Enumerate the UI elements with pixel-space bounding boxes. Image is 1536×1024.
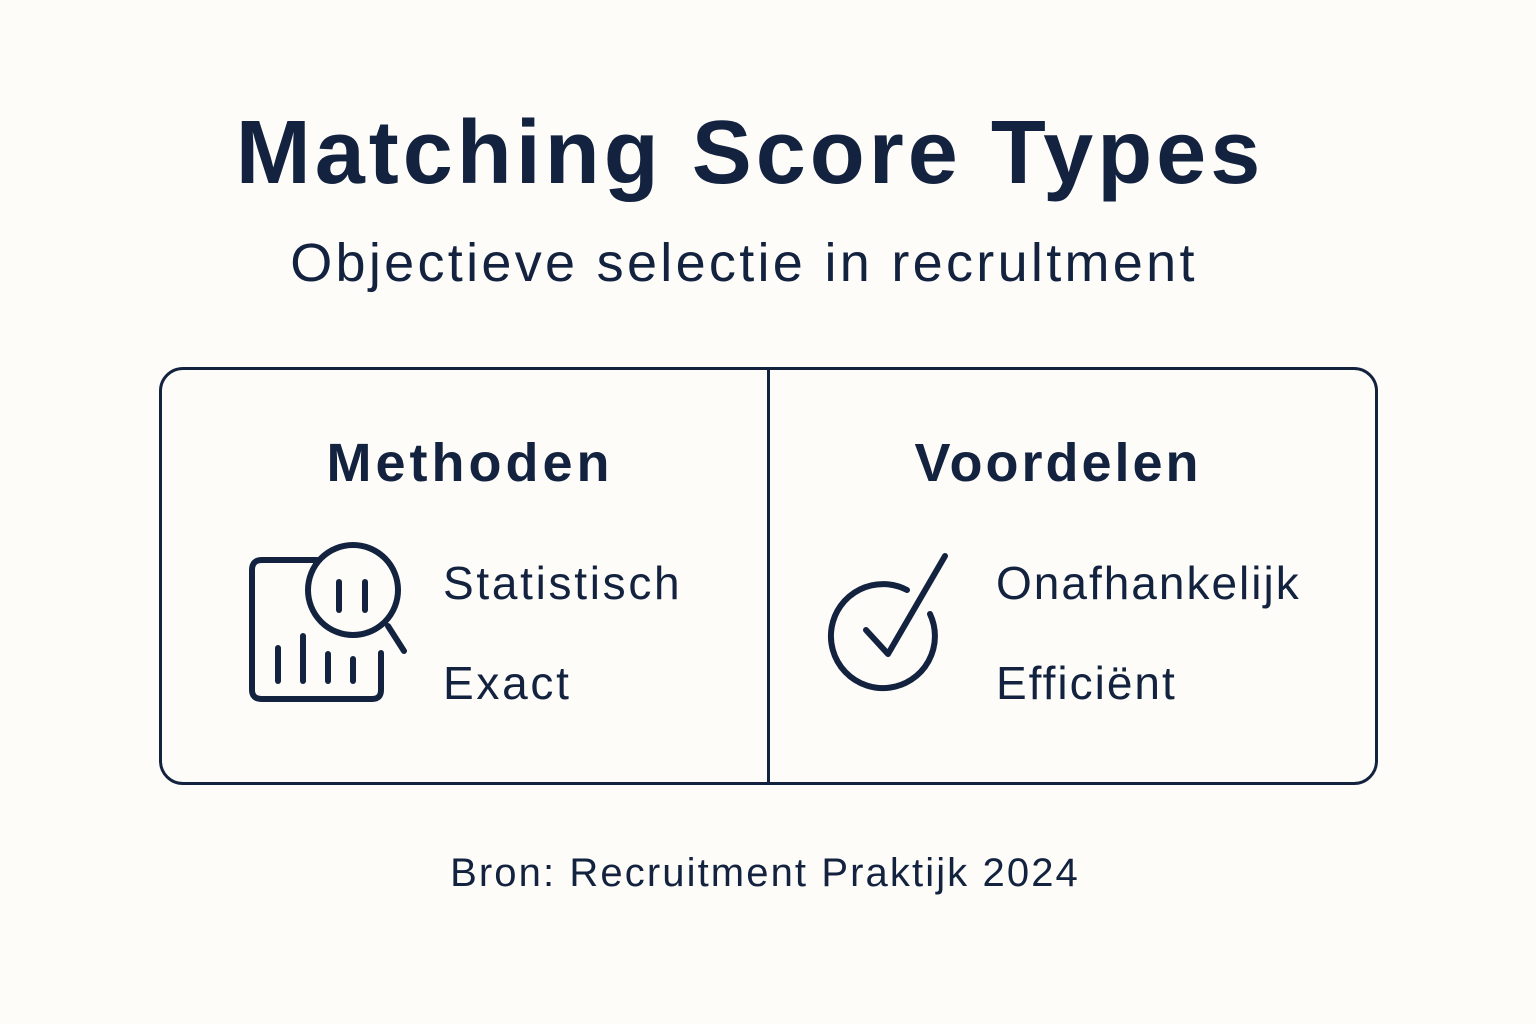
subtitle: Objectieve selectie in recrultment [290, 233, 1198, 293]
source: Bron: Recruitment Praktijk 2024 [450, 851, 1080, 895]
title: Matching Score Types [236, 103, 1264, 203]
heading: Methoden: Methoden [326, 433, 613, 493]
divider [767, 370, 770, 782]
panel [159, 367, 1378, 785]
text: Efficiënt: Efficiënt [996, 657, 1177, 709]
text: Statistisch: Statistisch [443, 557, 682, 609]
heading: Voordelen: Voordelen [914, 433, 1202, 493]
text: Onafhankelijk: Onafhankelijk [996, 557, 1301, 609]
text: Exact: Exact [443, 657, 572, 709]
